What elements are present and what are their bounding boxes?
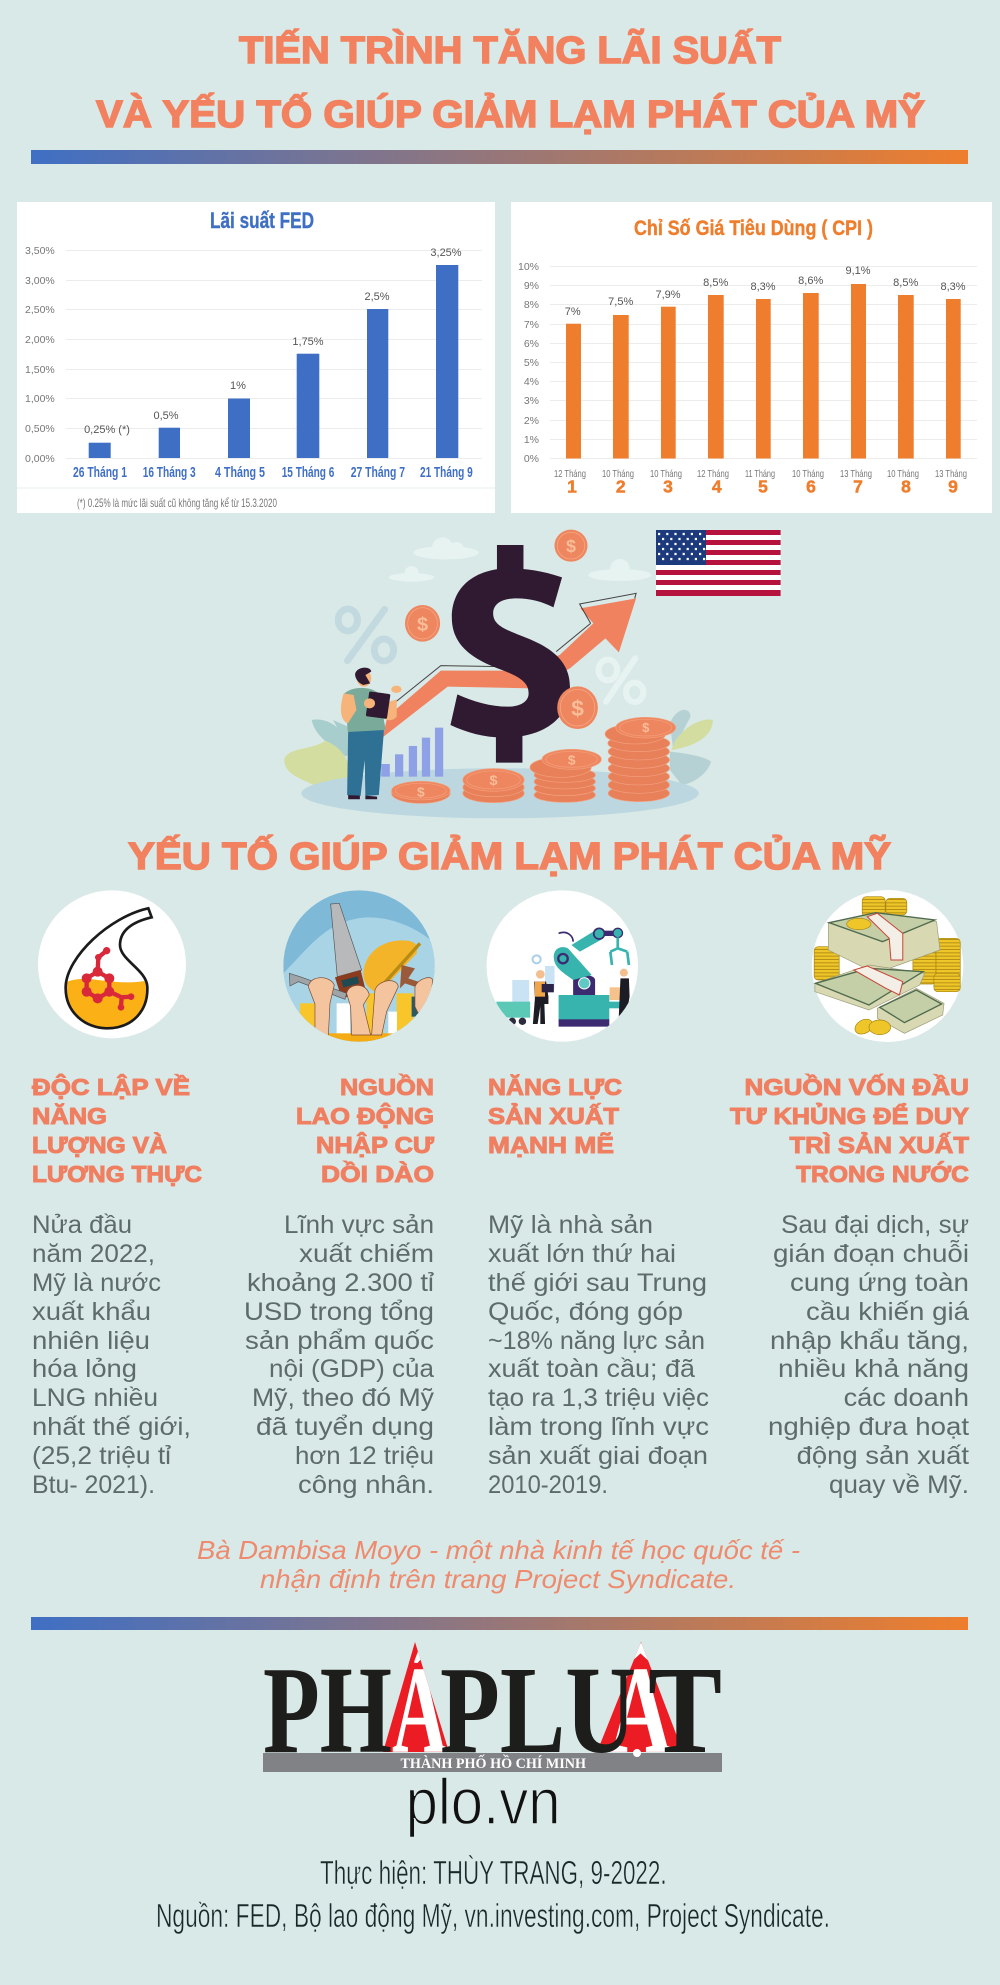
data labels: CPI: 8,3% [940,281,966,293]
category labels: FED: 15 Tháng 6 [282,464,334,481]
bars: CPI [566,284,961,458]
credits: Thực hiện: THÙY TRANG, 9-2022. [320,1854,667,1891]
panel: FED interest rate chart [17,202,495,513]
column body: ~18% năng lực sản [488,1327,705,1355]
data labels: CPI [565,265,966,318]
column heading: LƯỢNG VÀ [32,1131,167,1158]
bars: FED [89,265,458,458]
column body [768,1211,969,1499]
column body: Nửa đầu [32,1211,132,1239]
column body: xuất toàn cầu; đã [488,1355,695,1383]
quote [197,1535,800,1594]
column body: Mỹ, theo đó Mỹ [252,1384,435,1412]
gridlines and y axis: FED [25,245,482,465]
category labels: FED: 4 Tháng 5 [215,464,265,481]
column body: Mỹ là nước [32,1269,161,1297]
gradient bar bottom [31,1617,968,1630]
man with tablet [341,668,402,799]
logo: Pháp Luật: T [648,1642,722,1780]
floating coins: $ [571,696,584,721]
column body: xuất khẩu [32,1298,151,1326]
title [96,28,925,136]
percent sign left [338,609,394,661]
column body: nhập khẩu tăng, [770,1327,969,1355]
column body: USD trong tổng [244,1298,434,1326]
column heading: LƯƠNG THỰC [32,1161,202,1187]
column heading: NĂNG [32,1102,107,1129]
column heading: NHẬP CƯ [316,1131,435,1158]
category labels: FED [73,464,473,481]
gridlines and y axis: FED: 1,00% [25,393,55,405]
column body: nghiệp đưa hoạt [768,1413,969,1441]
heading: factors: YẾU TỐ GIÚP GIẢM LẠM PHÁT CỦA MỸ [128,833,891,878]
floating coins [405,530,598,729]
column body: làm trong lĩnh vực [488,1413,709,1441]
category labels: FED: 16 Tháng 3 [143,464,196,481]
column body: nhiên liệu [32,1327,150,1355]
column body: công nhân. [298,1471,434,1499]
icon: workers with tools [283,890,437,1047]
column 4: investment capital [730,1073,970,1499]
column body: tạo ra 1,3 triệu việc [488,1384,709,1412]
column heading: NGUỒN [340,1073,434,1100]
category labels: CPI: 6 [806,476,816,496]
logo: Pháp Luật: PLU [440,1642,636,1780]
floating coins: $ [566,536,576,556]
column body: nhiều khả năng [778,1355,969,1383]
column body: xuất chiếm [299,1240,434,1268]
title: VÀ YẾU TỐ GIÚP GIẢM LẠM PHÁT CỦA MỸ [96,91,925,136]
column body [32,1211,191,1499]
column heading: MẠNH MẼ [488,1132,614,1158]
gridlines and y axis: FED: 2,50% [25,304,55,316]
category labels: CPI: 2 [616,476,626,496]
ground ellipse [301,768,699,818]
column body: Sau đại dịch, sự [781,1211,969,1239]
purple bar chart [381,728,443,777]
category labels: CPI: 10 Tháng [792,468,824,480]
floating coins: $ [417,614,428,636]
title: TIẾN TRÌNH TĂNG LÃI SUẤT [239,28,781,72]
icon: US flag [656,530,781,596]
percent sign right [599,658,643,702]
column body: quay về Mỹ. [829,1471,969,1499]
gridlines and y axis: CPI: 2% [524,415,539,427]
column 2: immigrant labor [244,1073,435,1499]
coin stacks: $ [489,773,498,789]
gridlines and y axis: CPI: 9% [524,280,539,292]
chart title: FED: Lãi suất FED [210,208,314,233]
column heading [730,1073,970,1187]
column body: nội (GDP) của [269,1355,434,1383]
gridlines and y axis: CPI: 1% [524,434,539,446]
data labels: FED: 1% [230,380,246,392]
column heading: TRONG NƯỚC [796,1160,969,1187]
gridlines and y axis: FED: 0,50% [25,423,55,435]
column body: 2010-2019. [488,1471,608,1499]
gridlines and y axis: CPI: 6% [524,338,539,350]
column body: hóa lỏng [32,1355,137,1383]
logo: Pháp Luật [263,1642,722,1780]
category labels: CPI: 13 Tháng [840,468,872,480]
category labels: CPI: 8 [901,476,911,496]
category labels: CPI [554,468,967,496]
column body: xuất lớn thứ hai [488,1240,676,1268]
category labels: CPI: 10 Tháng [602,468,634,480]
gridlines and y axis: FED: 3,00% [25,275,55,287]
data labels: CPI: 8,3% [750,281,776,293]
gridlines and y axis: CPI: 3% [524,395,539,407]
coin stacks: $ [568,753,576,768]
column body: sản xuất giai đoạn [488,1442,708,1470]
coin stacks: $ [642,720,649,735]
column body: LNG nhiều [32,1384,158,1412]
logo: Pháp Luật: PH [263,1642,392,1780]
data labels: CPI: 7,9% [655,289,681,301]
category labels: CPI: 12 Tháng [697,468,729,480]
category labels: CPI: 12 Tháng [554,468,586,480]
gradient bar top [31,150,968,164]
data labels: FED: 0,25% (*) [84,424,130,436]
panel: CPI chart [511,202,992,513]
logo: Pháp Luật: Ậ [609,1642,672,1780]
gridlines and y axis: FED: 1,50% [25,364,55,376]
column heading: NĂNG LỰC [488,1073,622,1100]
category labels: FED: 21 Tháng 9 [420,464,473,481]
column body: nhất thế giới, [32,1413,191,1441]
column body: Quốc, đóng góp [488,1298,683,1326]
gridlines and y axis: CPI: 4% [524,376,539,388]
category labels: CPI: 11 Tháng [745,468,775,480]
column heading: DỒI DÀO [321,1160,434,1187]
clouds [389,537,652,582]
icon: factory robot arm [487,890,638,1042]
column heading: SẢN XUẤT [488,1101,620,1129]
column body: sản phẩm quốc [245,1327,434,1355]
column body: hơn 12 triệu [295,1442,434,1470]
column body: động sản xuất [797,1442,969,1470]
logo url: plo.vn [406,1765,561,1838]
dollar sign [450,545,570,763]
data labels: CPI: 9,1% [845,265,871,277]
data labels: FED: 0,5% [153,410,179,422]
category labels: FED: 27 Tháng 7 [351,464,405,481]
data labels: FED [84,247,462,436]
footnote: (*) 0.25% là mức lãi suất cũ không tăng kể từ 15.3.2020 [77,496,277,510]
rising arrow [383,593,636,737]
column body [488,1211,709,1499]
category labels: CPI: 7 [853,476,863,496]
illustration: dollar, arrow, coins and man [284,530,713,818]
data labels: CPI: 8,5% [893,277,918,289]
gridlines and y axis: CPI: 5% [524,357,539,369]
gridlines and y axis: FED: 3,50% [25,245,55,257]
column heading: TRÌ SẢN XUẤT [790,1130,970,1158]
coin stacks: $ [417,785,425,800]
column 3: production capacity [488,1073,709,1499]
column body: cầu khiến giá [806,1298,969,1326]
category labels: CPI: 13 Tháng [935,468,967,480]
column body: đã tuyển dụng [256,1413,434,1441]
category labels: CPI: 5 [758,476,768,496]
icon: money and gold coins [812,890,963,1042]
column body: các doanh [844,1384,969,1412]
column heading: LAO ĐỘNG [296,1102,434,1129]
column body: thế giới sau Trung [488,1269,707,1297]
data labels: CPI: 8,5% [703,277,728,289]
credits [156,1854,830,1934]
logo: Pháp Luật: Á [392,1642,447,1780]
gridlines and y axis: CPI: 0% [524,453,539,465]
coin stacks [392,717,676,803]
column heading [296,1073,435,1187]
category labels: CPI: 9 [948,476,958,496]
gridlines and y axis: CPI: 10% [518,261,539,273]
column heading: ĐỘC LẬP VỀ [32,1073,190,1100]
gridlines and y axis: FED: 2,00% [25,334,55,346]
category labels: CPI: 10 Tháng [650,468,682,480]
column 1: energy independence [32,1073,202,1499]
column body: gián đoạn chuỗi [773,1239,969,1268]
column body: (25,2 triệu tỉ [32,1442,171,1470]
gridlines and y axis: CPI [518,261,977,465]
logo: Pháp Luật: THÀNH PHỐ HỒ CHÍ MINH [400,1754,587,1772]
gridlines and y axis: CPI: 8% [524,299,539,311]
plants [284,710,713,787]
column heading: NGUỒN VỐN ĐẦU [744,1073,969,1100]
category labels: CPI: 1 [567,476,577,496]
quote: Bà Dambisa Moyo - một nhà kinh tế học quốc tế - [197,1535,800,1565]
quote: nhận định trên trang Project Syndicate. [260,1564,736,1594]
column body: Btu- 2021). [32,1471,155,1499]
chart title: CPI: Chỉ Số Giá Tiêu Dùng ( CPI ) [634,217,873,240]
data labels: CPI: 7,5% [608,296,633,308]
column heading [32,1073,202,1187]
data labels: FED: 1,75% [292,336,324,348]
column body: khoảng 2.300 tỉ [247,1269,434,1297]
column body: cung ứng toàn [790,1269,969,1297]
column heading: TƯ KHỦNG ĐỂ DUY [730,1101,969,1129]
data labels: CPI: 8,6% [798,275,823,287]
gridlines and y axis: CPI: 7% [524,319,539,331]
data labels: CPI: 7% [565,306,581,318]
gridlines and y axis: FED: 0,00% [25,453,55,465]
data labels: FED: 2,5% [364,291,390,303]
column body: Mỹ là nhà sản [488,1211,653,1239]
category labels: FED: 26 Tháng 1 [73,464,127,481]
column heading [488,1073,622,1158]
column body: năm 2022, [32,1240,155,1268]
column body [244,1211,435,1499]
category labels: CPI: 10 Tháng [887,468,919,480]
data labels: FED: 3,25% [430,247,462,259]
column body: Lĩnh vực sản [284,1211,434,1239]
category labels: CPI: 3 [663,476,673,496]
category labels: CPI: 4 [712,476,722,496]
icon: oil flask molecule [38,890,186,1038]
